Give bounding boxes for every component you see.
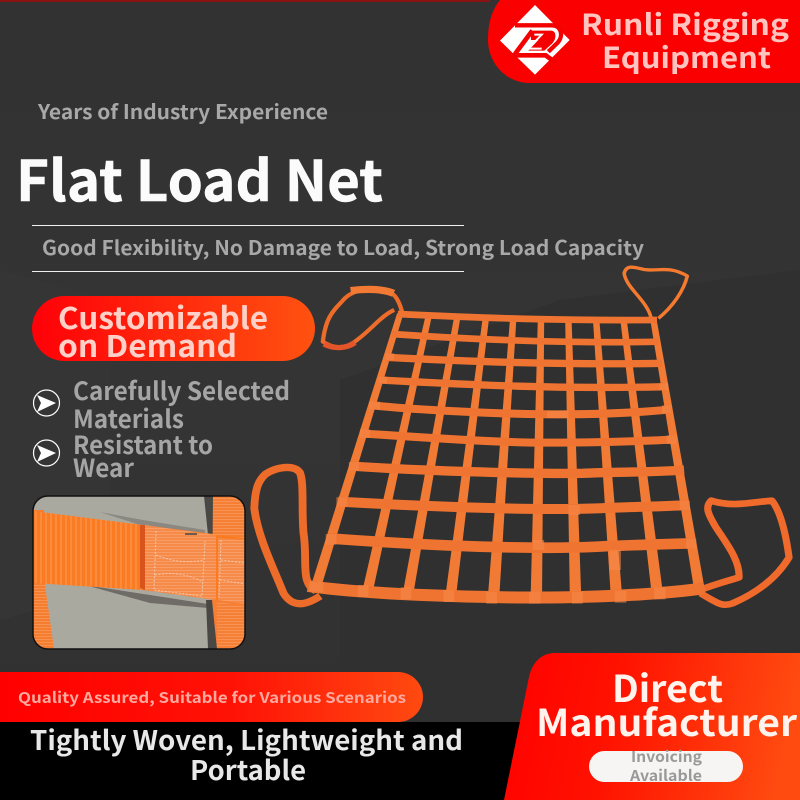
caption: tightly woven [30,719,463,788]
feature: carefully selected materials: Materials [73,400,184,436]
callout: customizable on demand: on Demand [58,322,237,366]
loop: lower right [701,501,789,605]
icon: brand logo [500,5,570,75]
subtitle with rules: Good Flexibility, No Damage to Load, Strong Load Capacity [42,232,645,261]
callout: customizable on demand [32,294,315,366]
caption: tightly woven: Tightly Woven, Lightweight and [30,719,463,758]
feature: resistant to wear [34,426,213,485]
net: stitched patches [310,353,696,604]
feature: carefully selected materials: Carefully Selected [73,372,290,408]
caption: tightly woven: Portable [190,749,306,788]
net: horizontal straps [308,314,704,597]
panel: direct manufacturer [504,653,800,800]
panel: direct manufacturer: Direct [612,659,723,713]
net: vertical straps [310,313,705,598]
brand name [581,2,789,77]
icon: arrow bullet [34,390,60,416]
title: Flat Load Net [16,137,383,218]
panel: direct manufacturer: Manufacturer [536,693,798,747]
product: orange cargo net [254,267,789,605]
badge: invoicing available [589,746,743,786]
banner: quality assured: Quality Assured, Suitable for Various Scenarios [18,687,406,708]
banner: quality assured [0,672,423,722]
feature: resistant to wear: Resistant to [73,426,213,462]
feature: carefully selected materials [34,372,290,436]
loop: top left [323,289,402,348]
brand name: Equipment [602,35,771,77]
icon: arrow bullet [34,440,60,466]
badge: invoicing available: Invoicing [631,746,702,767]
feature: resistant to wear: Wear [73,449,134,485]
bottom band [0,722,540,800]
eyebrow: years of experience: Years of Industry Experience [37,96,328,125]
loop: lower left [254,467,320,604]
photo: strap stitching close-up [33,496,245,649]
badge: invoicing available: Available [629,765,702,786]
callout: customizable on demand: Customizable [58,294,268,338]
loop: top right [624,267,687,318]
brand badge [488,0,800,83]
brand name: Runli Rigging [581,2,789,44]
